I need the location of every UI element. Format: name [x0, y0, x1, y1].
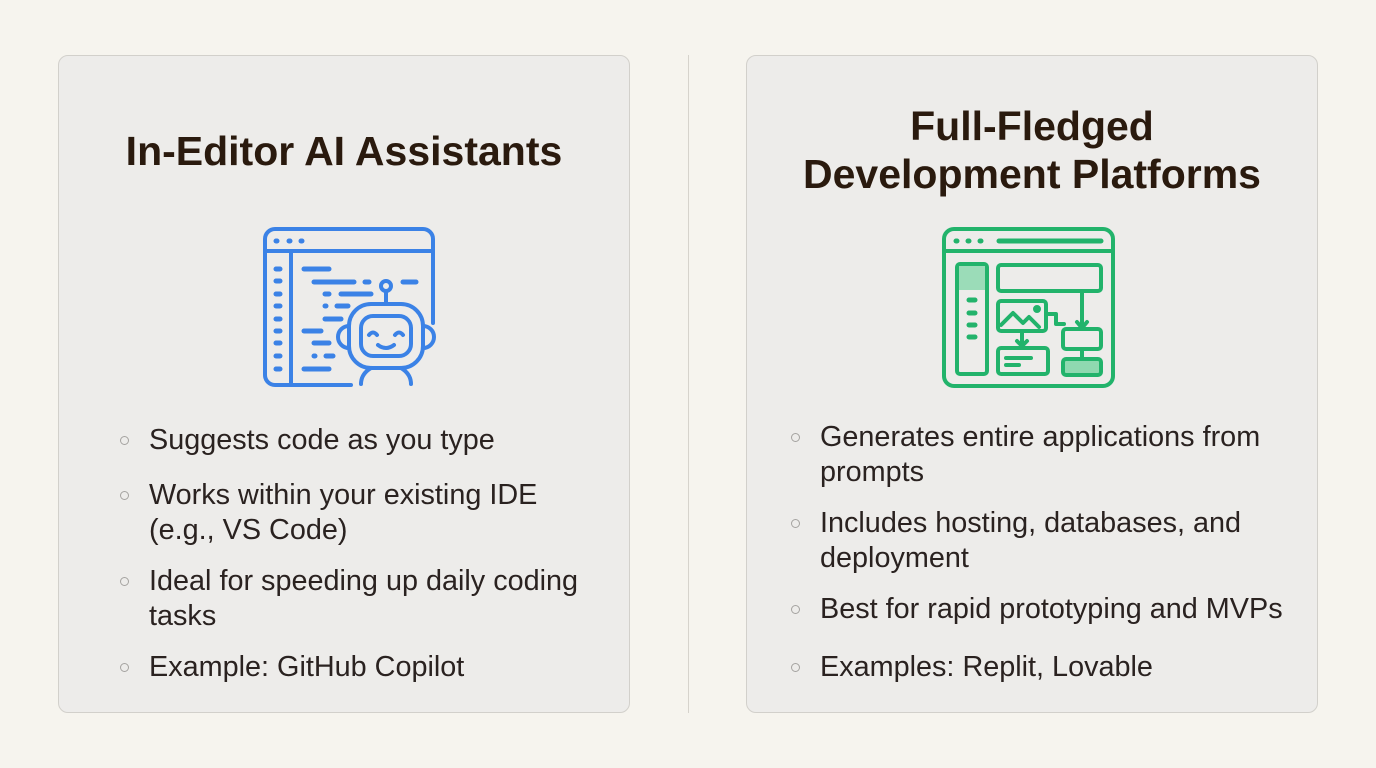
bullets: platforms: deployment [820, 542, 969, 574]
bullets: platforms [791, 421, 1283, 683]
bullets: in-editor: Ideal for speeding up daily coding [149, 565, 578, 597]
divider [688, 55, 689, 713]
title: platforms: Development Platforms [803, 151, 1261, 197]
bullets: platforms: prompts [820, 456, 924, 488]
bullets: in-editor [120, 424, 578, 683]
bullets: in-editor: Suggests code as you type [149, 424, 495, 456]
title: in-editor: In-Editor AI Assistants [126, 128, 562, 174]
bullets: platforms: Includes hosting, databases, and [820, 507, 1241, 539]
bullets: platforms: Generates entire applications from [820, 421, 1260, 453]
bullets: platforms: Examples: Replit, Lovable [820, 651, 1153, 683]
bullets: in-editor: tasks [149, 600, 216, 632]
panel: in-editor assistants [58, 55, 630, 713]
title: platforms [803, 103, 1261, 197]
icon: app builder [942, 227, 1115, 388]
bullets: in-editor: Works within your existing IDE [149, 479, 537, 511]
title: platforms: Full-Fledged [910, 103, 1154, 149]
bullets: in-editor: (e.g., VS Code) [149, 514, 347, 546]
panel: platforms [746, 55, 1318, 713]
bullets: in-editor: Example: GitHub Copilot [149, 651, 464, 683]
bullets: platforms: Best for rapid prototyping and MVPs [820, 593, 1283, 625]
icon: editor with robot [263, 227, 436, 387]
